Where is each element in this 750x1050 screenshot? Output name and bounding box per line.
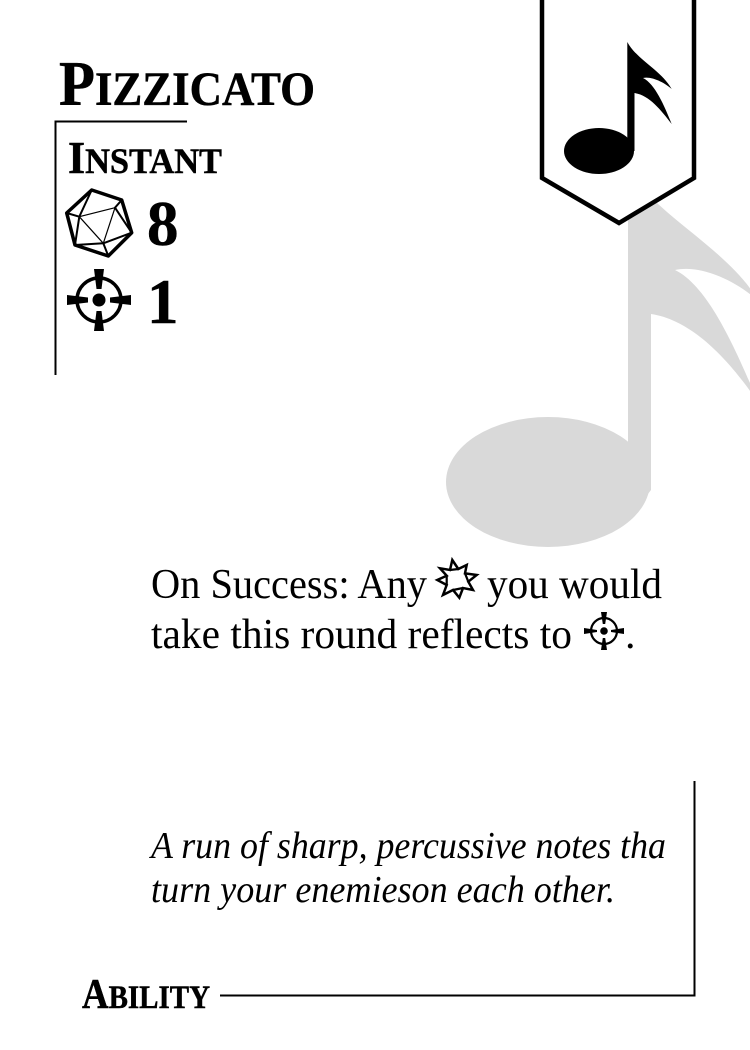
effect text [151,560,662,658]
line one end: you would [487,562,662,608]
banner shape [542,0,694,223]
banner with music note [542,0,694,223]
icon: small target reticle [584,612,624,650]
stats frame [56,122,187,375]
flavour line two: turn your enemieson each other. [151,869,615,911]
icon: music note [564,42,672,174]
flavour line one: A run of sharp, percussive notes tha [148,825,666,867]
difficulty value: 8 [147,189,178,259]
icon: damage burst [437,560,477,598]
title: PIZZICATO [59,49,315,119]
category label: ABILITY [82,972,210,1018]
type label: INSTANT [68,132,222,183]
icon: target reticle [67,269,131,331]
footer frame [220,781,694,996]
line two: take this round reflects to [151,612,572,658]
line two period: . [625,612,636,658]
line one start: On Success: Any [151,562,427,608]
flavour text [148,825,666,911]
icon: twenty-sided die [67,190,132,256]
range value: 1 [147,267,178,337]
watermark: large grey music note [446,169,750,547]
